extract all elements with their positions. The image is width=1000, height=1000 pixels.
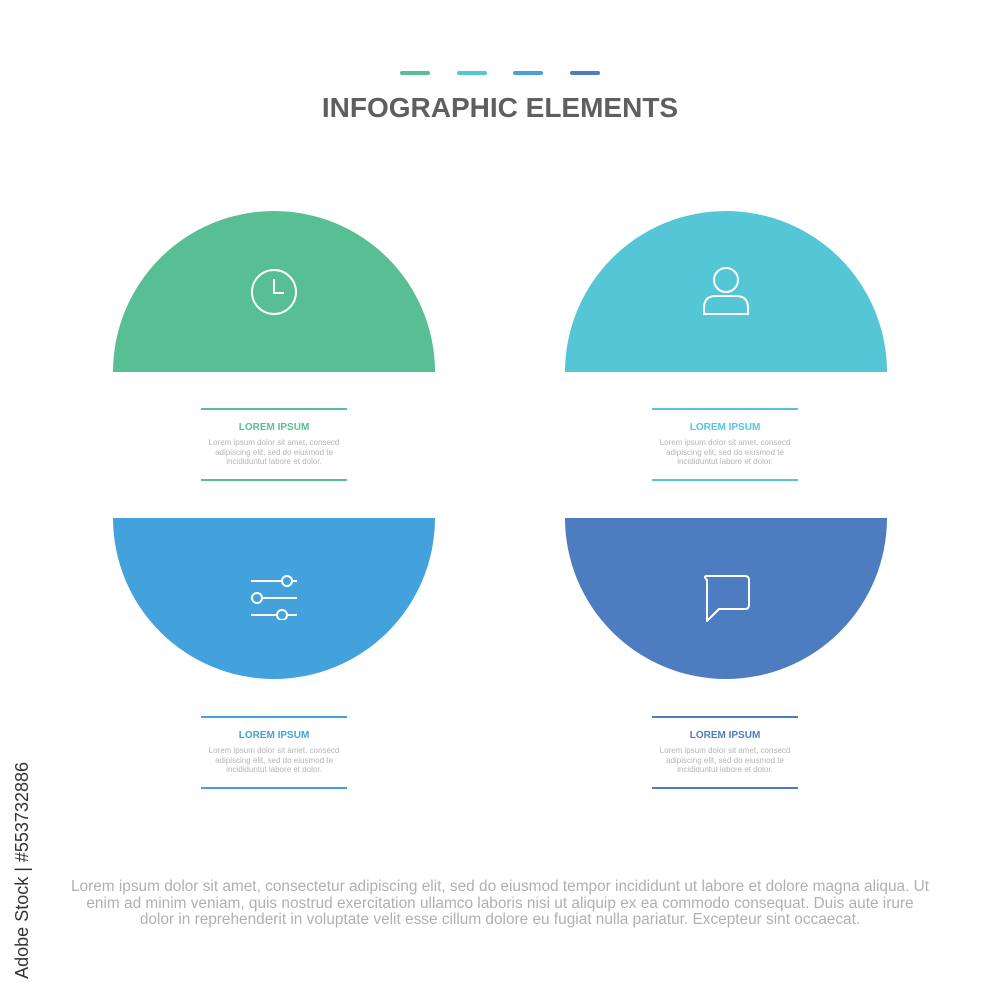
text block 2 xyxy=(652,408,798,481)
icon: chat bubble xyxy=(704,575,750,622)
footer paragraph: Lorem ipsum dolor sit amet, consectetur adipiscing elit, sed do eiusmod tempor incididunt ut labore et dolore magna aliqua. Ut xyxy=(71,878,929,895)
text block 1: Lorem ipsum dolor sit amet, consecd adipiscing elit, sed do eiusmod te incididuntut labore et dolor. xyxy=(209,438,339,466)
panel: green half circle xyxy=(113,211,435,372)
footer paragraph xyxy=(71,878,929,928)
panel: dark blue half circle xyxy=(565,518,887,679)
text block 3: Lorem ipsum dolor sit amet, consecd adipiscing elit, sed do eiusmod te incididuntut labore et dolor. xyxy=(209,746,339,774)
text block 4 xyxy=(652,716,798,789)
footer paragraph: dolor in reprehenderit in voluptate velit esse cillum dolore eu fugiat nulla pariatur. Excepteur sint occaecat. xyxy=(140,911,860,928)
text block 4: LOREM IPSUM xyxy=(690,730,760,741)
text block 2: LOREM IPSUM xyxy=(690,422,760,433)
text block 3: LOREM IPSUM xyxy=(239,730,309,741)
text block 2: Lorem ipsum dolor sit amet, consecd adipiscing elit, sed do eiusmod te incididuntut labore et dolor. xyxy=(660,438,790,466)
text block 4: Lorem ipsum dolor sit amet, consecd adipiscing elit, sed do eiusmod te incididuntut labore et dolor. xyxy=(660,746,790,774)
watermark id: Adobe Stock | #553732886 xyxy=(12,762,32,979)
text block 1: LOREM IPSUM xyxy=(239,422,309,433)
icon: clock xyxy=(251,269,297,315)
footer paragraph: enim ad minim veniam, quis nostrud exercitation ullamco laboris nisi ut aliquip ex ea commodo consequat. Duis aute irure xyxy=(86,894,914,912)
panel: blue half circle xyxy=(113,518,435,679)
decorative dashes xyxy=(400,71,600,75)
icon: user xyxy=(703,267,749,315)
text block 3 xyxy=(201,716,347,789)
text block 1 xyxy=(201,408,347,481)
panel: cyan half circle xyxy=(565,211,887,372)
icon: sliders xyxy=(251,575,297,620)
title: INFOGRAPHIC ELEMENTS xyxy=(322,92,678,123)
